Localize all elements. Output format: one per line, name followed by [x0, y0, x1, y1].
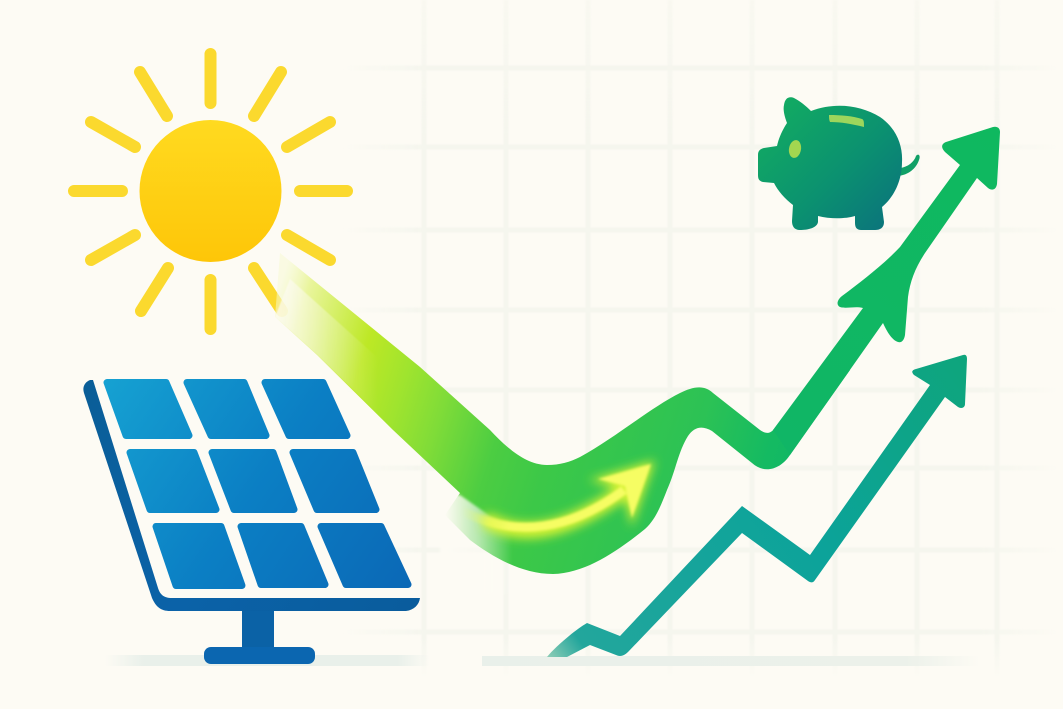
sun rays	[74, 54, 347, 329]
ground shadows	[105, 655, 980, 666]
pig eye	[788, 139, 802, 159]
panel frame	[83, 380, 420, 611]
icon: solar panel	[83, 380, 420, 664]
panel cells	[107, 382, 408, 586]
pig body	[758, 97, 902, 230]
icon: sun	[74, 54, 347, 329]
main green growth arrow	[773, 127, 1000, 455]
ribbon tail fade	[440, 494, 520, 595]
energy ribbon	[275, 253, 850, 595]
sun disc	[140, 120, 282, 262]
arrow core	[462, 464, 651, 527]
icon: glowing arrow	[462, 464, 651, 530]
ribbon band	[275, 253, 850, 574]
panel stand	[204, 605, 315, 664]
lighter lower band near sun	[275, 279, 378, 414]
teal growth arrow	[547, 355, 967, 657]
arrow glow	[490, 464, 651, 530]
coin slot	[829, 115, 864, 127]
icon: piggy bank	[758, 97, 920, 230]
pig tail	[898, 155, 920, 176]
background grid	[340, 0, 1063, 680]
